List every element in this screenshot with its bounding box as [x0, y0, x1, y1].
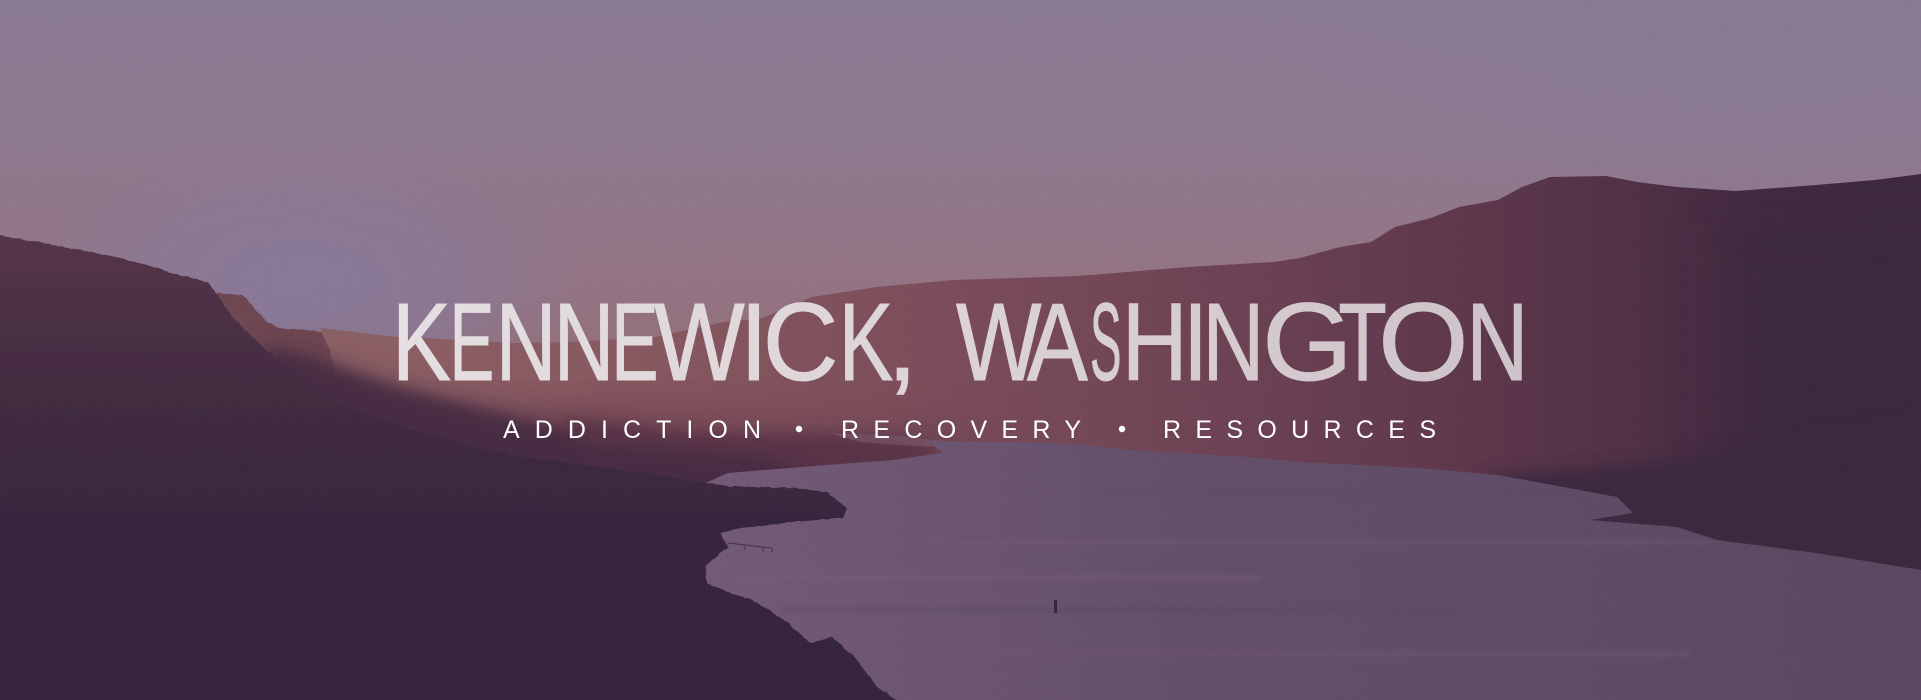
title word: Kennewick: I: [740, 281, 768, 404]
subtitle: addiction: ADDICTION: [503, 416, 761, 444]
title word: Washington: G: [1262, 281, 1353, 404]
title word: Washington: N: [1202, 281, 1264, 404]
title word: Kennewick: C: [763, 281, 838, 404]
subtitle: resources: RESOURCES: [1163, 416, 1436, 444]
title word: Kennewick: E: [450, 281, 494, 404]
separator dot: [796, 426, 802, 432]
title word: Washington: W: [956, 281, 1042, 404]
title word: Washington: S: [1090, 281, 1122, 404]
title word: Washington: T: [1338, 281, 1387, 404]
rose ridge behind the foreground: [214, 293, 345, 420]
title word: Kennewick: K: [839, 281, 893, 404]
title word: Washington: H: [1122, 281, 1188, 404]
title word: Kennewick: ,: [887, 281, 918, 404]
title word: Washington: N: [1466, 281, 1528, 404]
pier: [728, 543, 772, 552]
title word: Kennewick: K: [392, 281, 451, 404]
title word: Washington: I: [1183, 281, 1208, 404]
title word: Kennewick: W: [654, 281, 745, 404]
river water: [690, 441, 1921, 700]
lit water sliver: [830, 433, 945, 447]
title word: Washington: A: [1027, 281, 1088, 404]
title word: Kennewick: N: [496, 281, 556, 404]
subtitle: recovery: RECOVERY: [841, 416, 1081, 444]
buoy: [1054, 600, 1057, 613]
foreground dark ridge: [0, 235, 903, 700]
title word: Kennewick: E: [611, 281, 658, 404]
distant mountains: [321, 170, 1921, 600]
title: [392, 281, 1528, 404]
separator dot: [1119, 426, 1125, 432]
title word: Washington: O: [1378, 281, 1469, 404]
soft haze on the foreground slope: [268, 345, 1921, 590]
title word: Kennewick: N: [554, 281, 614, 404]
subtitle: [503, 416, 1436, 444]
